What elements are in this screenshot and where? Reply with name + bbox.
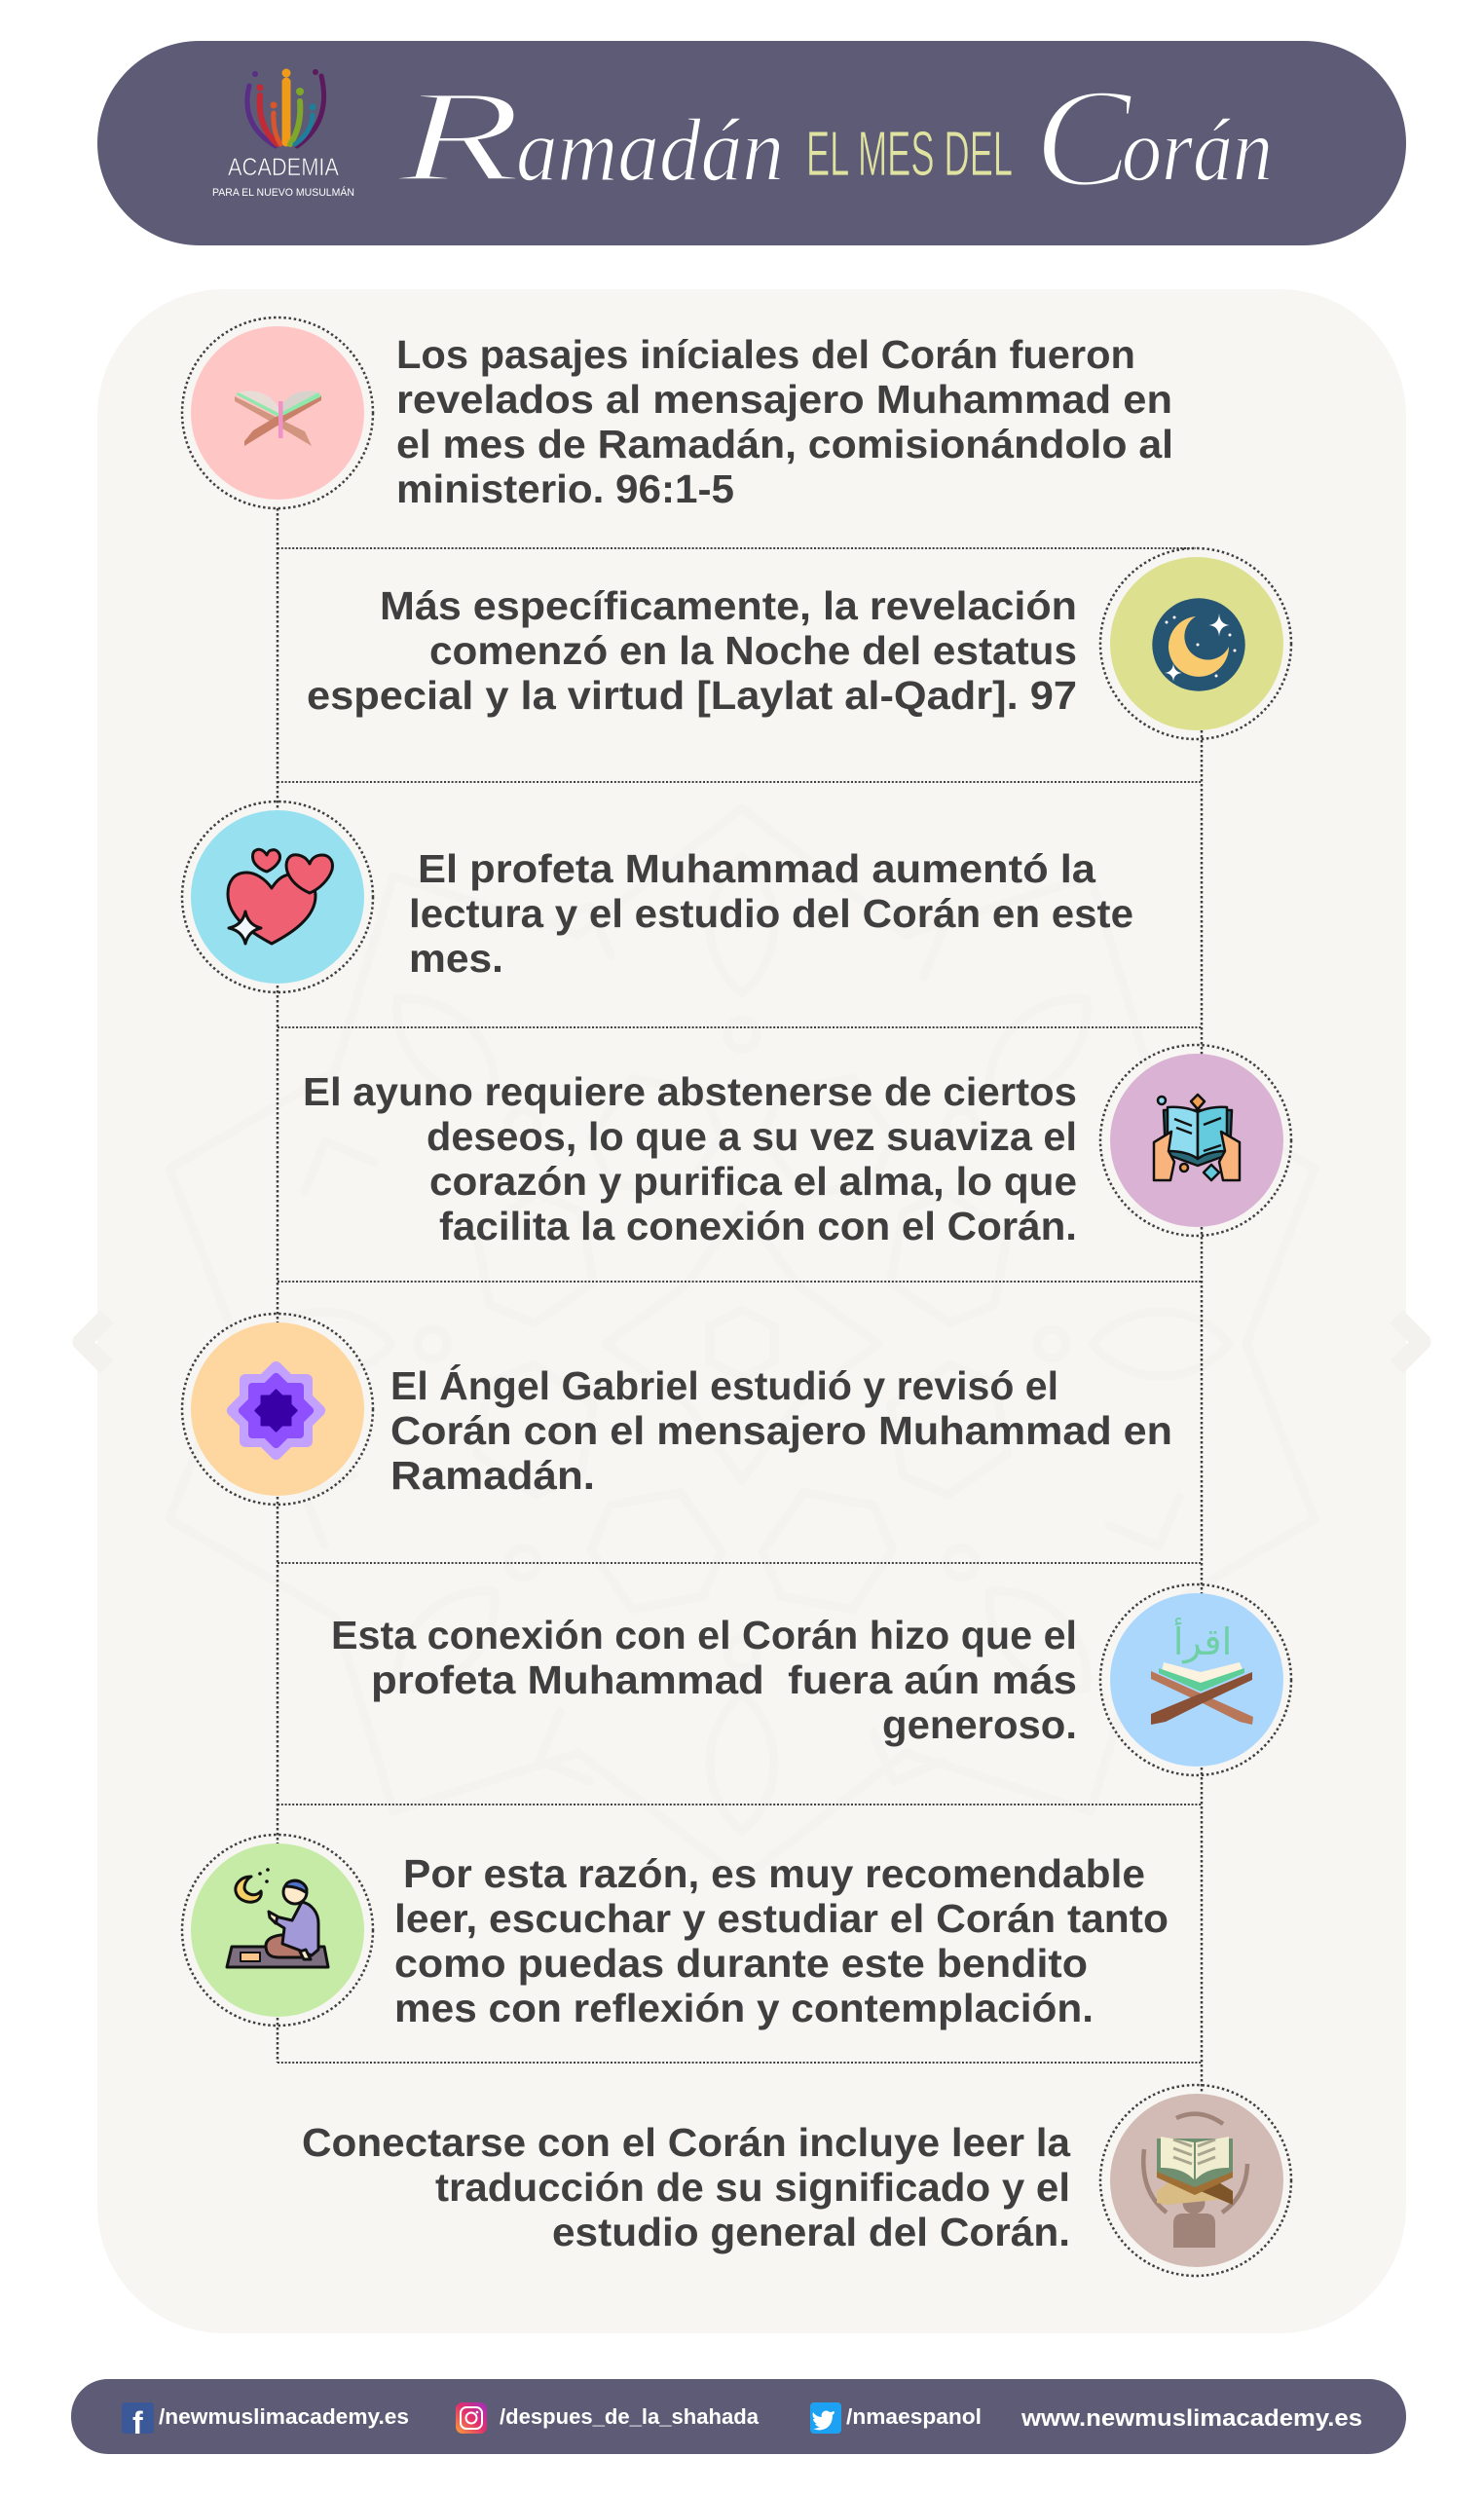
step 5 text: Corán con el mensajero Muhammad en bbox=[390, 1408, 1172, 1453]
step 1 text: revelados al mensajero Muhammad en bbox=[396, 377, 1172, 422]
step 2 text: comenzó en la Noche del estatus bbox=[429, 628, 1077, 673]
logo: Academia: PARA EL NUEVO MUSULMÁN bbox=[212, 186, 354, 199]
step 3 text: mes. bbox=[409, 936, 503, 981]
icon: instagram bbox=[456, 2402, 487, 2434]
footer bar bbox=[71, 2379, 1406, 2454]
step 7 text bbox=[394, 1851, 1169, 2030]
step 1 text: el mes de Ramadán, comisionándolo al bbox=[396, 422, 1173, 466]
logo: Academia: ACADEMIA bbox=[228, 154, 339, 181]
title: Ramadán EL MES DEL Corán: EL MES DEL bbox=[806, 118, 1013, 189]
icon: person with book and arcs bbox=[1143, 2114, 1247, 2248]
step 2 text: Más específicamente, la revelación bbox=[380, 583, 1077, 628]
background mandala pattern bbox=[169, 808, 1315, 1879]
step 5 text: Ramadán. bbox=[390, 1453, 595, 1498]
icon: facebook bbox=[122, 2402, 154, 2440]
logo: Academia bbox=[212, 68, 354, 199]
step 8 text: traducción de su significado y el bbox=[435, 2165, 1070, 2210]
step 1 text: ministerio. 96:1-5 bbox=[396, 466, 734, 511]
step 5 text: El Ángel Gabriel estudió y revisó el bbox=[390, 1363, 1058, 1408]
step 3: blue circle and hearts bbox=[182, 801, 373, 992]
step 8 text bbox=[302, 2120, 1071, 2254]
website: www.newmuslimacademy.es bbox=[1020, 2405, 1362, 2432]
icon: person praying on mat with moon bbox=[227, 1868, 328, 1967]
step 4 text bbox=[303, 1069, 1077, 1248]
title: Ramadán EL MES DEL Corán bbox=[395, 60, 1273, 216]
icon: hearts and sparkle bbox=[228, 849, 332, 944]
icon: open book held by hands bbox=[1154, 1095, 1240, 1180]
facebook handle: /newmuslimacademy.es bbox=[159, 2404, 409, 2429]
step 4 text: deseos, lo que a su vez suaviza el bbox=[427, 1114, 1077, 1159]
step 7 text: mes con reflexión y contemplación. bbox=[394, 1986, 1094, 2030]
step 3 text bbox=[409, 846, 1133, 981]
step 4: purple circle and book in hands bbox=[1100, 1045, 1291, 1236]
step 2 text: especial y la virtud [Laylat al-Qadr]. 97 bbox=[307, 673, 1077, 718]
icon: Quran on stand with Arabic word bbox=[1151, 1618, 1253, 1725]
step 7: green circle and praying figure bbox=[182, 1835, 373, 2026]
step 6 text: generoso. bbox=[882, 1702, 1077, 1747]
icon: eight-point star bbox=[224, 1358, 328, 1463]
icon: facebook: f bbox=[132, 2405, 143, 2440]
step 8 text: Conectarse con el Corán incluye leer la bbox=[302, 2120, 1071, 2165]
step 2: green circle and moon bbox=[1100, 548, 1291, 739]
step 7 text: como puedas durante este bendito bbox=[394, 1941, 1088, 1986]
step 7 text: Por esta razón, es muy recomendable bbox=[403, 1851, 1145, 1896]
step 6 text bbox=[331, 1613, 1077, 1747]
title: Ramadán EL MES DEL Corán: amadán bbox=[516, 100, 784, 200]
step 1 text: Los pasajes iníciales del Corán fueron bbox=[396, 332, 1135, 377]
step 8 text: estudio general del Corán. bbox=[552, 2210, 1070, 2254]
title: Ramadán EL MES DEL Corán: R bbox=[395, 64, 522, 209]
side chevrons bbox=[82, 1317, 1422, 1367]
icon: twitter bbox=[810, 2402, 841, 2434]
dotted connector lines bbox=[278, 508, 1202, 2092]
main panel bbox=[97, 289, 1406, 2333]
step 6: light blue circle and Quran stand bbox=[1100, 1584, 1291, 1775]
header banner bbox=[97, 41, 1406, 245]
step 4 text: El ayuno requiere abstenerse de ciertos bbox=[303, 1069, 1077, 1114]
step 2 text bbox=[307, 583, 1077, 718]
instagram handle: /despues_de_la_shahada bbox=[500, 2404, 760, 2429]
step 3 text: lectura y el estudio del Corán en este bbox=[409, 891, 1133, 936]
title: Ramadán EL MES DEL Corán: C bbox=[1034, 60, 1133, 216]
step 1: pink circle and open book bbox=[182, 317, 373, 508]
step 5: orange circle and star bbox=[182, 1314, 373, 1505]
step 4 text: corazón y purifica el alma, lo que bbox=[429, 1159, 1077, 1204]
step 6 text: profeta Muhammad fuera aún más bbox=[371, 1657, 1077, 1702]
step 4 text: facilita la conexión con el Corán. bbox=[439, 1204, 1077, 1248]
icon: Quran on stand with Arabic word: اقرأ bbox=[1173, 1618, 1232, 1664]
step 8: brown circle and reader with Quran bbox=[1100, 2085, 1291, 2276]
icon: book on stand bbox=[235, 391, 321, 446]
step 1 text bbox=[396, 332, 1173, 511]
step 7 text: leer, escuchar y estudiar el Corán tanto bbox=[394, 1896, 1169, 1941]
icon: crescent moon bbox=[1152, 598, 1245, 691]
title: Ramadán EL MES DEL Corán: orán bbox=[1122, 100, 1273, 200]
step 6 text: Esta conexión con el Corán hizo que el bbox=[331, 1613, 1077, 1657]
step 3 text: El profeta Muhammad aumentó la bbox=[418, 846, 1096, 891]
twitter handle: /nmaespanol bbox=[846, 2404, 982, 2429]
step 5 text bbox=[390, 1363, 1172, 1498]
